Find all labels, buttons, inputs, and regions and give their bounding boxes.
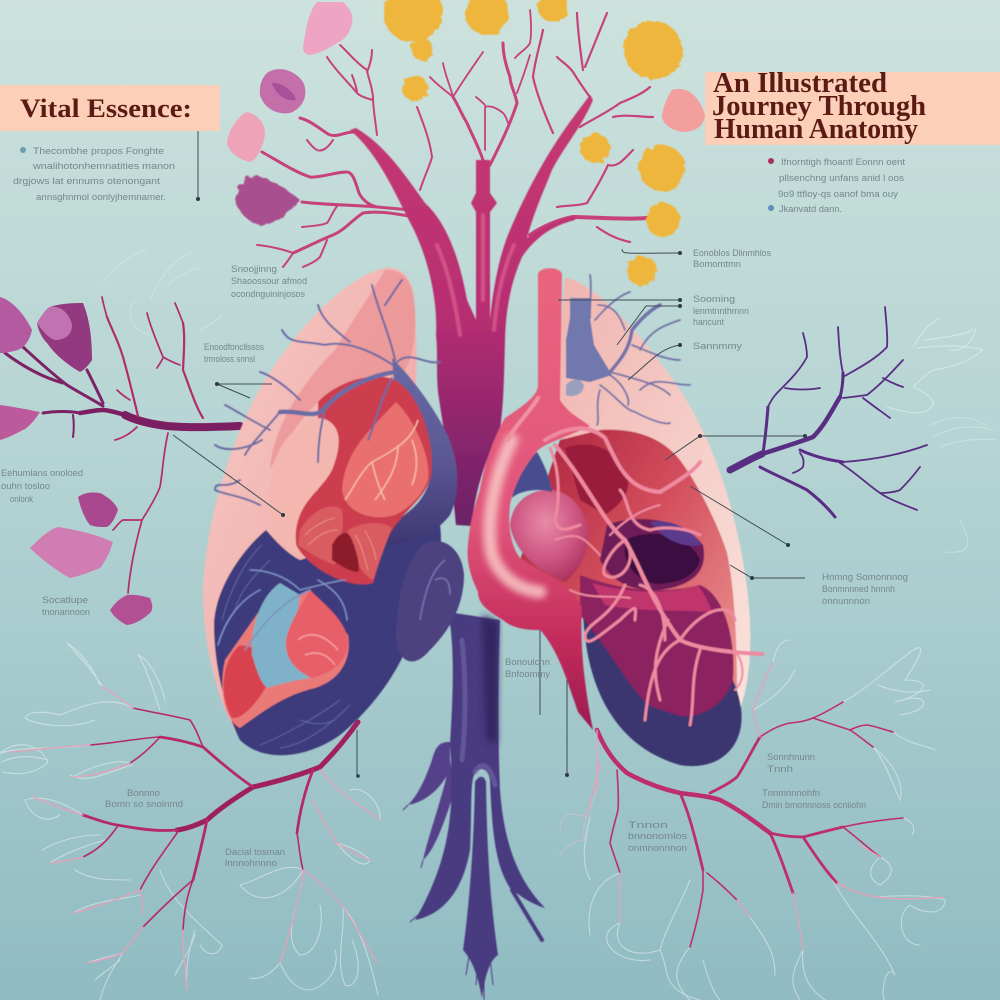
anatomical labels: Bnfoommy [505, 669, 551, 679]
pink petals upper [227, 2, 705, 225]
aorta highlight [490, 440, 540, 592]
pink heart ball [510, 490, 588, 582]
anatomical labels: ouhn tosloo [1, 481, 50, 491]
right intro text block: Jkanvatd dann. [779, 204, 842, 214]
muscle folds [298, 507, 343, 565]
pink petals left [0, 297, 152, 625]
lower left cavity [222, 590, 349, 728]
yellow pollen clusters [383, 0, 685, 286]
right intro text block [768, 157, 906, 214]
right title banner: Journey Through [712, 91, 926, 122]
anatomical labels: lenmtnnthmnn [693, 306, 749, 316]
lower right branch [587, 663, 943, 950]
left lung outer [203, 268, 417, 738]
right red chamber [520, 430, 737, 690]
dark red chamber [565, 444, 628, 515]
anatomical labels: Socatlupe [42, 595, 88, 605]
left intro text block: annsghnmol oonlyjhemnamer. [36, 192, 166, 202]
anatomical labels: onlonk [10, 494, 33, 504]
anatomical labels: Dmin bmonnnoss ocniiohn [762, 800, 866, 810]
right title banner [705, 68, 1000, 145]
lower left branch [10, 687, 380, 990]
right title banner: An Illustrated [713, 68, 887, 99]
anatomical labels: Sannmmy [693, 341, 743, 351]
right title banner: Human Anatomy [714, 114, 918, 145]
left purple branch [5, 297, 240, 593]
right lung outer [555, 278, 750, 718]
dark pocket [600, 519, 704, 590]
gray-blue vessel [378, 358, 457, 545]
magenta lower mass [580, 575, 733, 716]
anatomical labels: Eehumlans onoloed [1, 468, 83, 478]
anatomical labels: bnnonomlos [628, 831, 688, 841]
central magenta trunk [350, 95, 593, 526]
anatomical labels: onmnonnnon [628, 843, 687, 853]
anatomical labels: Bonoulchn [505, 657, 550, 667]
left dark lobe [214, 525, 441, 755]
right intro text block: pllsenchng unfans anid l oos [779, 173, 905, 183]
anatomical labels: onnunnnon [822, 596, 870, 606]
right dark lobe [583, 610, 742, 766]
left lung upper shading [270, 270, 415, 470]
coral mass [342, 402, 429, 517]
left intro text block: drgjows lat ennums otenongant [13, 176, 161, 186]
anatomical labels: Tnnmnnnohfn [762, 788, 820, 798]
anatomical labels: Shaoossour afmod [231, 276, 307, 286]
anatomical labels [1, 248, 908, 868]
left intro text block: Thecombhe propos Fonghte [33, 146, 164, 156]
anatomical labels: lnnnohnnno [225, 858, 277, 868]
anatomical labels: Bomomtmn [693, 259, 741, 269]
anatomical labels: Bonnno [127, 788, 160, 798]
magenta band [592, 583, 712, 612]
anatomical labels: Sooming [693, 294, 735, 304]
dark lobe veins [222, 545, 350, 748]
leader lines and dots [173, 131, 807, 778]
aorta [467, 268, 593, 730]
left intro text block: wnalihotonhemnatities manon [32, 161, 175, 171]
pale left lobe [270, 418, 339, 557]
left title banner: Vital Essence: [20, 94, 192, 123]
pink vessels [545, 428, 762, 725]
anatomical labels: Tnnh [767, 764, 793, 774]
anatomical labels: Dacial tosman [225, 847, 285, 857]
anatomical labels: ocondnguininjosos [231, 289, 305, 299]
dark blue wedge [512, 452, 552, 498]
trunk highlight [437, 215, 514, 335]
dark purple lower trunk [403, 612, 545, 1000]
left title banner [0, 85, 220, 131]
wispy white veins [0, 250, 997, 1000]
anatomical labels: Enoodfoncllssos [204, 342, 264, 352]
anatomical labels: hancunt [693, 317, 724, 327]
anatomical labels: tnonannoon [42, 607, 90, 617]
anatomical labels: trmoloss snnsl [204, 354, 255, 364]
anatomical labels: Snoojjinng [231, 264, 277, 274]
trachea [566, 298, 612, 382]
right intro text block: Ifnorntigh fhoantl Eonnn oent [781, 157, 906, 167]
upper vascular tree [257, 10, 653, 267]
anatomical labels: Eonoblos Dlinmhlos [693, 248, 771, 258]
right intro text block: 9o9 ttfloy-qs oanof bma ouy [778, 189, 899, 199]
coral veins [345, 420, 418, 500]
purple central lobe [396, 541, 464, 661]
gray vessels left lung [215, 280, 440, 650]
gray vessels right lung [590, 275, 690, 425]
anatomical labels: Sonnhnunn [767, 752, 815, 762]
anatomical labels: Tnnon [628, 820, 668, 830]
right purple branch [730, 307, 927, 517]
left intro text block [13, 146, 175, 202]
anatomical labels: Bomn so snoinmd [105, 799, 183, 809]
left red cavity [294, 377, 432, 584]
anatomical labels: Bonmnnned hnnnh [822, 584, 895, 594]
anatomical labels: Hnmng Somonnnog [822, 572, 908, 582]
